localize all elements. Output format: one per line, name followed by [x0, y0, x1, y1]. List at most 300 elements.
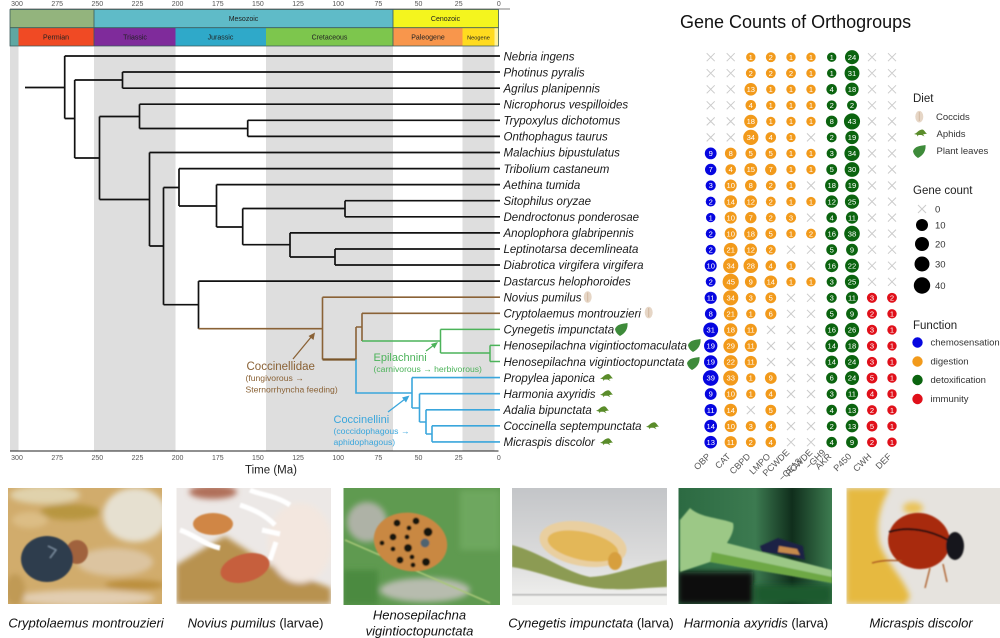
row: Nicrophorus vespilloides: 4	[749, 101, 753, 110]
row: Adalia bipunctata	[705, 404, 897, 416]
Epilachnini branches	[362, 329, 500, 362]
legend: gene count: 30	[935, 259, 946, 270]
row: Diabrotica virgifera virgifera	[705, 258, 896, 273]
row: Dastarcus helophoroides: 1	[789, 277, 793, 286]
species labels: Dastarcus helophoroides	[504, 276, 631, 288]
legend: gene count: 0	[935, 204, 940, 216]
row: Henosepilachna vigintioctomaculata: 14	[827, 342, 836, 351]
species labels: Agrilus planipennis	[502, 84, 600, 96]
bottom time axis: 200	[172, 455, 184, 462]
species labels: Harmonia axyridis	[504, 389, 596, 401]
label: Coccinellidae	[246, 361, 338, 395]
row: Henosepilachna vigintioctopunctata: 3	[870, 358, 874, 367]
row: Aethina tumida	[706, 179, 896, 192]
matrix column labels: OBP	[692, 451, 712, 472]
top time axis: 225	[132, 1, 143, 8]
row: Anoplophora glabripennis: 16	[827, 229, 836, 238]
row: Dendroctonus ponderosae	[706, 212, 896, 224]
row: Novius pumilus: 34	[726, 293, 735, 302]
top time axis: 275	[51, 1, 63, 8]
row: Henosepilachna vigintioctomaculata: 18	[848, 342, 856, 351]
icon: coccid, Cryptolaemus	[645, 307, 653, 318]
heading: Gene Counts of Orthogroups	[680, 12, 911, 32]
row: Anoplophora glabripennis: 2	[809, 229, 813, 238]
black backbone branches	[25, 56, 500, 329]
row: Henosepilachna vigintioctopunctata: 19	[706, 358, 715, 367]
row: Dendroctonus ponderosae: 4	[830, 213, 834, 222]
species labels: Tribolium castaneum	[504, 164, 610, 176]
row: Trypoxylus dichotomus: 43	[848, 117, 856, 126]
row: Aethina tumida: 8	[749, 181, 753, 190]
row: Aethina tumida: 18	[827, 181, 836, 190]
row: Novius pumilus: 11	[848, 293, 856, 302]
row: Adalia bipunctata: 14	[726, 406, 735, 415]
row: Dastarcus helophoroides: 3	[830, 277, 834, 286]
row: Henosepilachna vigintioctomaculata: 1	[890, 342, 894, 351]
row: Nebria ingens: 1	[749, 53, 753, 62]
row: Photinus pyralis: 31	[848, 69, 856, 78]
row: Coccinella septempunctata: 1	[890, 422, 894, 431]
row: Harmonia axyridis: 11	[848, 390, 856, 399]
species labels: Leptinotarsa decemlineata	[504, 244, 638, 256]
matrix column labels	[692, 447, 894, 483]
row: Diabrotica virgifera virgifera: 10	[706, 261, 715, 270]
row: Tribolium castaneum	[705, 162, 896, 177]
row: Agrilus planipennis: 1	[789, 85, 793, 94]
row: Nebria ingens: 1	[830, 53, 834, 62]
row: Tribolium castaneum: 1	[809, 165, 813, 174]
row: Dastarcus helophoroides: 25	[848, 277, 856, 286]
row: Henosepilachna vigintioctomaculata: 3	[870, 342, 874, 351]
species labels: Henosepilachna vigintioctomaculata	[504, 341, 687, 353]
row: Sitophilus oryzae	[706, 194, 896, 209]
top time axis: 75	[375, 1, 382, 8]
bottom time axis: 125	[292, 455, 304, 462]
row: Cryptolaemus montrouzieri: 6	[769, 309, 773, 318]
row: Cryptolaemus montrouzieri: 1	[890, 309, 894, 318]
era row	[10, 10, 498, 28]
row: Leptinotarsa decemlineata: 5	[830, 245, 834, 254]
matrix column labels: −GH9	[804, 447, 827, 471]
row: Dendroctonus ponderosae: 2	[769, 213, 773, 222]
photo captions: Cynegetis impunctata (larva)	[508, 616, 674, 630]
period row: Cretaceous	[312, 34, 348, 42]
row: Harmonia axyridis: 3	[830, 390, 834, 399]
row: Adalia bipunctata: 5	[769, 406, 773, 415]
diet icons beside species	[584, 291, 701, 445]
species labels: Photinus pyralis	[504, 68, 585, 80]
species labels	[502, 52, 687, 449]
legend: diet: Plant leaves	[936, 146, 989, 157]
bottom time axis: 175	[212, 455, 224, 462]
row: Henosepilachna vigintioctomaculata: 19	[706, 342, 715, 351]
row: Coccinella septempunctata: 2	[830, 422, 834, 431]
row: Henosepilachna vigintioctopunctata: 14	[827, 358, 836, 367]
row: Micraspis discolor: 2	[749, 438, 753, 447]
row: Harmonia axyridis: 4	[870, 390, 874, 399]
matrix column labels: P450	[831, 451, 853, 473]
row: Adalia bipunctata: 1	[890, 406, 894, 415]
row: Novius pumilus: 3	[870, 293, 874, 302]
top time axis: 0	[497, 1, 501, 8]
photo: Micraspis discolor	[846, 488, 1000, 604]
row: Aethina tumida: 2	[769, 181, 773, 190]
axis title: Time (Ma)	[245, 464, 297, 476]
row: Harmonia axyridis: 1	[890, 390, 894, 399]
row: Sitophilus oryzae: 1	[809, 197, 813, 206]
row: Cynegetis impunctata: 1	[890, 326, 894, 335]
label: Coccinellini: aphidophagous)	[334, 437, 395, 447]
row: Coccinella septempunctata: 13	[848, 422, 856, 431]
arrow: Coccinellini	[388, 396, 410, 412]
row: Cynegetis impunctata: 11	[747, 326, 755, 335]
row: Nicrophorus vespilloides: 1	[809, 101, 813, 110]
row: Photinus pyralis: 1	[830, 69, 834, 78]
row: Malachius bipustulatus: 34	[848, 149, 856, 158]
row: Diabrotica virgifera virgifera: 22	[848, 261, 856, 270]
arrow: Epilachnini	[426, 342, 438, 351]
label: Coccinellidae: (fungivorous →	[246, 373, 304, 383]
legend: function: detoxification	[930, 375, 986, 386]
row: Henosepilachna vigintioctopunctata: 1	[890, 358, 894, 367]
row: Nebria ingens: 1	[789, 53, 793, 62]
row: Sitophilus oryzae: 25	[848, 197, 856, 206]
row: Aethina tumida: 19	[848, 181, 856, 190]
species labels: Micraspis discolor	[504, 437, 596, 449]
species labels: Novius pumilus	[504, 292, 582, 304]
row: Nebria ingens	[707, 50, 896, 64]
row: Anoplophora glabripennis: 2	[709, 229, 713, 238]
row: Dendroctonus ponderosae: 3	[789, 213, 793, 222]
row: Aethina tumida: 10	[726, 181, 735, 190]
row: Micraspis discolor: 9	[850, 438, 854, 447]
arrow: Coccinellidae	[293, 332, 315, 359]
icon: leaf, Cynegetis	[615, 323, 628, 336]
row: Malachius bipustulatus: 5	[769, 149, 773, 158]
row: Nebria ingens: 1	[809, 53, 813, 62]
icon: leaf, H. vigintioctopunctata	[687, 357, 700, 370]
row: Propylea japonica: 39	[706, 374, 715, 383]
row: Leptinotarsa decemlineata: 2	[769, 245, 773, 254]
photo: Cynegetis impunctata	[512, 488, 667, 605]
row: Malachius bipustulatus: 1	[789, 149, 793, 158]
row: Dastarcus helophoroides: 9	[749, 277, 753, 286]
row: Trypoxylus dichotomus: 18	[747, 117, 755, 126]
species labels: Aethina tumida	[502, 180, 580, 192]
row: Agrilus planipennis: 1	[769, 85, 773, 94]
row: Nicrophorus vespilloides	[707, 100, 896, 111]
row: Sitophilus oryzae: 12	[747, 197, 755, 206]
row: Adalia bipunctata: 4	[830, 406, 834, 415]
row: Nicrophorus vespilloides: 2	[850, 101, 854, 110]
row: Novius pumilus	[705, 290, 897, 305]
icon: aphid, Adalia	[596, 406, 609, 413]
legend: function: Function	[913, 320, 957, 332]
row: Cryptolaemus montrouzieri: 9	[850, 309, 854, 318]
row: Leptinotarsa decemlineata	[706, 243, 896, 257]
species labels: Onthophagus taurus	[504, 132, 608, 144]
top time axis: 150	[252, 1, 264, 8]
legend: diet	[913, 93, 989, 158]
row: Sitophilus oryzae: 2	[709, 197, 713, 206]
row: Coccinella septempunctata: 4	[769, 422, 773, 431]
row: Photinus pyralis: 1	[809, 69, 813, 78]
row: Aethina tumida: 1	[789, 181, 793, 190]
species labels: Coccinella septempunctata	[504, 421, 642, 433]
legend: function	[912, 320, 1000, 405]
row: Photinus pyralis: 2	[769, 69, 773, 78]
bottom time axis: 275	[51, 455, 63, 462]
matrix column labels: LMPO	[747, 451, 772, 476]
label: Coccinellini: (coccidophagous →	[334, 426, 409, 436]
matrix column labels: AKR	[813, 451, 834, 472]
icon: aphids	[914, 130, 927, 136]
row: Adalia bipunctata: 13	[848, 406, 856, 415]
row: Propylea japonica: 1	[749, 374, 753, 383]
row: Trypoxylus dichotomus: 8	[830, 117, 834, 126]
row: Cryptolaemus montrouzieri: 1	[749, 309, 753, 318]
icon: plant leaves	[913, 145, 926, 158]
bottom time axis: 0	[497, 455, 501, 462]
period row: Permian	[43, 34, 69, 42]
period row: Triassic	[123, 34, 147, 42]
photo captions: Henosepilachna	[373, 608, 466, 622]
row: Onthophagus taurus: 4	[769, 133, 773, 142]
row: Cryptolaemus montrouzieri	[705, 307, 897, 321]
icon: aphid, Micraspis	[600, 438, 613, 445]
row: Sitophilus oryzae: 12	[827, 197, 836, 206]
row: Coccinella septempunctata: 5	[870, 422, 874, 431]
row: Cynegetis impunctata	[703, 322, 897, 337]
row: Anoplophora glabripennis: 5	[769, 229, 773, 238]
row: Henosepilachna vigintioctopunctata: 11	[747, 358, 755, 367]
row: Harmonia axyridis	[705, 388, 897, 400]
row: Leptinotarsa decemlineata: 2	[709, 245, 713, 254]
row: Nicrophorus vespilloides: 1	[769, 101, 773, 110]
era row: Cenozoic	[431, 16, 461, 23]
matrix column labels: CBPD	[728, 451, 753, 476]
row: Propylea japonica: 33	[726, 374, 735, 383]
row: Cryptolaemus montrouzieri: 21	[726, 309, 735, 318]
row: Leptinotarsa decemlineata: 21	[726, 245, 735, 254]
photo captions: Novius pumilus (larvae)	[188, 616, 323, 630]
row: Cynegetis impunctata: 18	[726, 326, 735, 335]
row: Leptinotarsa decemlineata: 9	[850, 245, 854, 254]
row: Henosepilachna vigintioctomaculata: 11	[747, 342, 755, 351]
row: Propylea japonica: 24	[848, 374, 856, 383]
top time axis: 50	[415, 1, 422, 8]
row: Dastarcus helophoroides: 2	[709, 277, 713, 286]
row: Dendroctonus ponderosae: 7	[749, 213, 753, 222]
row: Anoplophora glabripennis: 18	[747, 229, 755, 238]
species labels: Sitophilus oryzae	[504, 196, 591, 208]
top time axis: 300	[11, 1, 23, 8]
geologic timescale header	[10, 1, 510, 46]
legend: function: digestion	[930, 357, 969, 368]
icon: aphid, Coccinella	[646, 422, 659, 429]
row: Onthophagus taurus: 1	[789, 133, 793, 142]
row: Agrilus planipennis: 4	[830, 85, 834, 94]
row: Diabrotica virgifera virgifera: 28	[747, 261, 755, 270]
bottom time axis: 300	[11, 455, 23, 462]
species labels: Nicrophorus vespilloides	[504, 100, 628, 112]
row: Novius pumilus: 2	[890, 293, 894, 302]
bottom time axis: 250	[91, 455, 103, 462]
legend: diet: Diet	[913, 93, 934, 105]
species labels: Propylea japonica	[504, 373, 595, 385]
row: Malachius bipustulatus: 5	[749, 149, 753, 158]
top time axis: 100	[332, 1, 344, 8]
Coccinellini branches	[356, 360, 500, 442]
time-band shading	[10, 46, 494, 451]
row: Dastarcus helophoroides	[706, 274, 896, 290]
row: Tribolium castaneum: 1	[789, 165, 793, 174]
row: Propylea japonica: 5	[870, 374, 874, 383]
species labels: Adalia bipunctata	[502, 405, 592, 417]
photo captions: Cryptolaemus montrouzieri	[8, 616, 165, 630]
row: Dendroctonus ponderosae: 11	[848, 213, 856, 222]
row: Micraspis discolor	[704, 436, 897, 448]
icon: aphid, Harmonia	[600, 390, 613, 397]
row: Harmonia axyridis: 1	[749, 390, 753, 399]
matrix column labels: CWH	[851, 451, 873, 474]
row: Tribolium castaneum: 5	[830, 165, 834, 174]
row: Nebria ingens: 2	[769, 53, 773, 62]
photo: Harmonia axyridis	[678, 488, 832, 604]
species labels: Anoplophora glabripennis	[502, 228, 634, 240]
row: Dendroctonus ponderosae: 10	[726, 213, 735, 222]
top time axis: 125	[292, 1, 304, 8]
period row: Neogene	[467, 36, 490, 42]
row: Propylea japonica	[703, 370, 897, 386]
row: Henosepilachna vigintioctomaculata: 29	[726, 342, 735, 351]
row: Micraspis discolor: 4	[769, 438, 773, 447]
row: Onthophagus taurus: 2	[830, 133, 834, 142]
row: Tribolium castaneum: 7	[709, 165, 713, 174]
Coccinellidae branches	[198, 297, 500, 360]
bottom time axis: 75	[375, 455, 382, 462]
row: Novius pumilus: 3	[830, 293, 834, 302]
row: Anoplophora glabripennis: 1	[789, 229, 793, 238]
period row: Jurassic	[208, 34, 234, 42]
row: Malachius bipustulatus: 8	[729, 149, 733, 158]
row: Nicrophorus vespilloides: 2	[830, 101, 834, 110]
row: Dastarcus helophoroides: 45	[726, 277, 735, 286]
row: Anoplophora glabripennis: 10	[726, 229, 735, 238]
row: Nebria ingens: 24	[848, 53, 856, 62]
top time axis	[10, 1, 510, 9]
row: Harmonia axyridis: 10	[726, 390, 735, 399]
row: Agrilus planipennis: 1	[809, 85, 813, 94]
icon: aphid, Propylea	[600, 374, 613, 381]
row: Sitophilus oryzae: 1	[789, 197, 793, 206]
row: Novius pumilus: 3	[749, 293, 753, 302]
icon: coccid, Novius	[584, 291, 592, 303]
bubble matrix	[703, 50, 897, 449]
row: Malachius bipustulatus	[705, 146, 896, 161]
top time axis: 250	[91, 1, 103, 8]
legend: gene count: 40	[935, 281, 946, 292]
species labels: Trypoxylus dichotomus	[504, 116, 620, 128]
row: Onthophagus taurus: 34	[747, 133, 755, 142]
label: Coccinellini: Coccinellini	[334, 414, 389, 426]
row: Cryptolaemus montrouzieri: 5	[830, 309, 834, 318]
row: Sitophilus oryzae: 2	[769, 197, 773, 206]
row: Micraspis discolor: 13	[706, 438, 715, 447]
legend: function: chemosensation	[930, 338, 1000, 349]
legend: diet: Aphids	[936, 129, 966, 140]
row: Malachius bipustulatus: 3	[830, 149, 834, 158]
row: Tribolium castaneum: 7	[769, 165, 773, 174]
period row: Paleogene	[411, 34, 445, 42]
row: Diabrotica virgifera virgifera: 34	[726, 261, 735, 270]
row: Dendroctonus ponderosae: 1	[709, 213, 713, 222]
row: Cryptolaemus montrouzieri: 2	[870, 309, 874, 318]
row: Tribolium castaneum: 30	[848, 165, 856, 174]
species labels: Cynegetis impunctata	[504, 325, 614, 337]
row: Micraspis discolor: 1	[890, 438, 894, 447]
row: Sitophilus oryzae: 14	[726, 197, 735, 206]
row: Adalia bipunctata: 11	[707, 406, 715, 415]
top time axis: 25	[455, 1, 463, 8]
row: Malachius bipustulatus: 9	[709, 149, 713, 158]
photo: Cryptolaemus montrouzieri	[5, 486, 167, 606]
species labels: Diabrotica virgifera virgifera	[504, 260, 643, 272]
row: Onthophagus taurus: 19	[848, 133, 856, 142]
species labels: Dendroctonus ponderosae	[504, 212, 639, 224]
row: Trypoxylus dichotomus: 1	[809, 117, 813, 126]
label: Coccinellidae: Sternorrhyncha feeding)	[246, 385, 338, 395]
row: Diabrotica virgifera virgifera: 4	[769, 261, 773, 270]
row: Cynegetis impunctata: 16	[827, 326, 836, 335]
row: Trypoxylus dichotomus	[707, 113, 896, 129]
row: Novius pumilus: 11	[707, 293, 715, 302]
photo captions	[8, 608, 973, 638]
species labels: Malachius bipustulatus	[504, 148, 620, 160]
row: Diabrotica virgifera virgifera: 1	[789, 261, 793, 270]
matrix column labels: DEF	[874, 451, 894, 471]
row: Tribolium castaneum: 15	[747, 165, 755, 174]
label: Epilachnini: (carnivorous → herbivorous)	[374, 364, 482, 374]
era row: Mesozoic	[229, 16, 259, 23]
row: Coccinella septempunctata	[704, 420, 897, 432]
row: Photinus pyralis: 2	[749, 69, 753, 78]
phylogenetic tree	[25, 56, 500, 447]
bottom time axis: 25	[455, 455, 463, 462]
row: Henosepilachna vigintioctomaculata	[704, 339, 897, 353]
row: Coccinella septempunctata: 14	[706, 422, 715, 431]
label: Epilachnini: Epilachnini	[374, 352, 427, 364]
row: Cynegetis impunctata: 26	[848, 326, 856, 335]
row: Agrilus planipennis: 13	[747, 85, 755, 94]
row: Coccinella septempunctata: 3	[749, 422, 753, 431]
bottom time axis: 225	[132, 455, 143, 462]
top time axis: 175	[212, 1, 224, 8]
legend: gene count: Gene count	[913, 185, 973, 197]
row: Leptinotarsa decemlineata: 12	[747, 245, 755, 254]
row: Dastarcus helophoroides: 1	[809, 277, 813, 286]
row: Cynegetis impunctata: 31	[706, 326, 715, 335]
label: Coccinellidae: Coccinellidae	[246, 361, 315, 373]
row: Micraspis discolor: 4	[830, 438, 834, 447]
row: Adalia bipunctata: 2	[870, 406, 874, 415]
row: Micraspis discolor: 11	[727, 438, 735, 447]
bottom time axis: 150	[252, 455, 264, 462]
row: Photinus pyralis	[707, 66, 896, 81]
bottom time axis	[10, 451, 501, 476]
row: Aethina tumida: 3	[709, 181, 713, 190]
row: Nicrophorus vespilloides: 1	[789, 101, 793, 110]
